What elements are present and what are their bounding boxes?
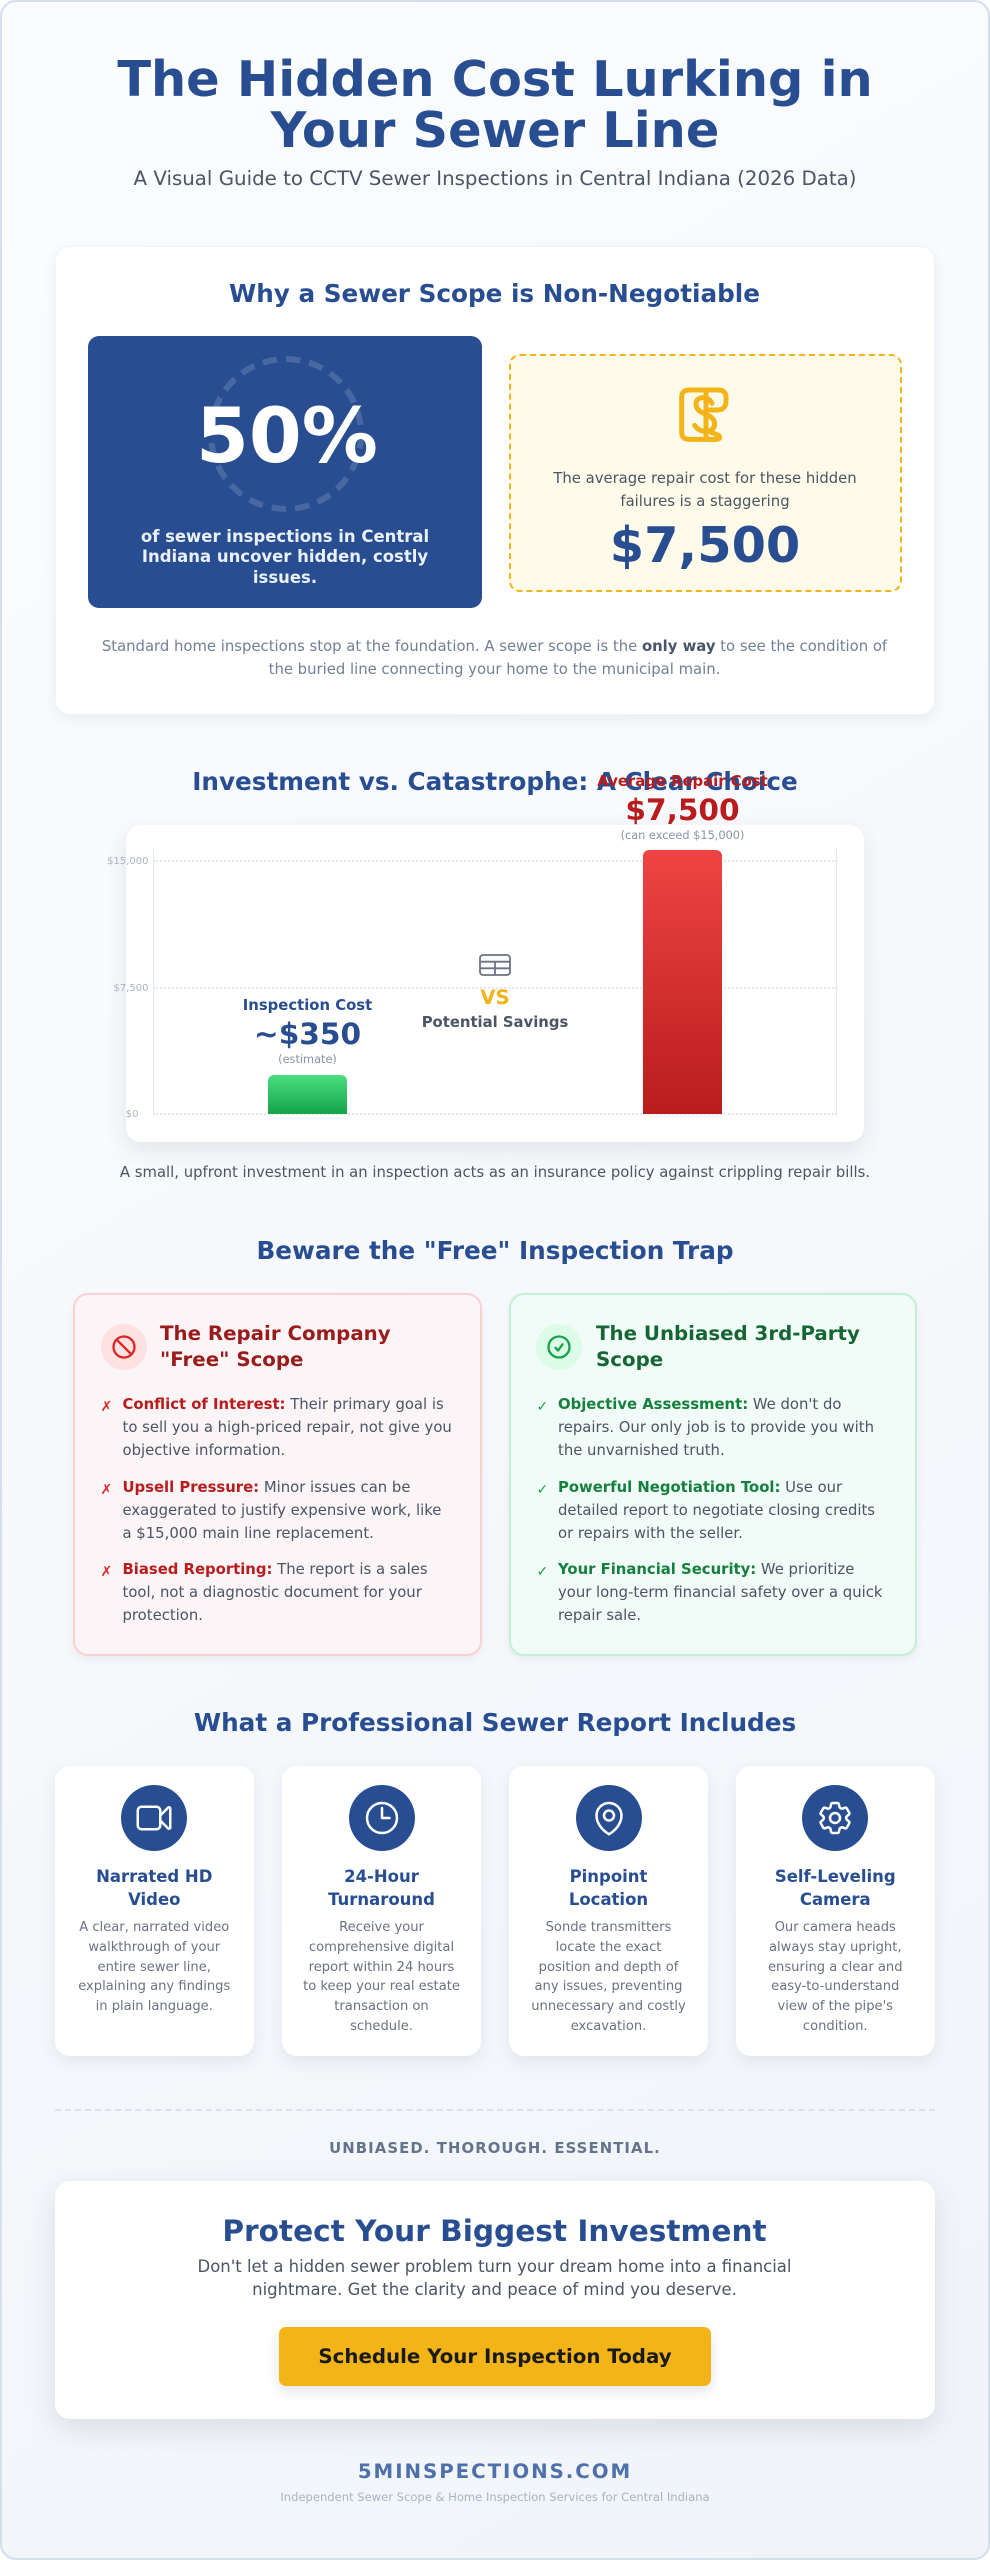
description: Sonde transmitters [546, 1920, 671, 1935]
value: inspection cost: ~$350 [254, 1017, 361, 1051]
label: VS: VS [480, 986, 510, 1009]
description: schedule. [350, 2019, 413, 2034]
item: negotiation tool: Powerful Negotiation Tool: Use our [558, 1479, 842, 1496]
icon: map pin [576, 1785, 642, 1851]
heading: unbiased scope: Scope [596, 1348, 663, 1371]
title: Self-Leveling [775, 1867, 896, 1886]
axis label 15000: $15,000 [107, 856, 148, 866]
item: biased reporting [122, 1561, 428, 1624]
panel: cost bar chart [126, 824, 864, 1142]
note: estimate: (estimate) [278, 1052, 337, 1066]
title [569, 1867, 648, 1909]
heading: unbiased scope [596, 1322, 860, 1371]
heading: repair company scope [160, 1322, 391, 1371]
marker 1: ✓ [536, 1399, 548, 1415]
axis label 0: $0 [126, 1108, 138, 1120]
title: Turnaround [328, 1890, 435, 1909]
item: conflict of interest: to sell you a high-priced repair, not give you [122, 1419, 452, 1436]
panel: why a sewer scope [54, 246, 934, 715]
description: explaining any findings [78, 1979, 230, 1994]
icon: video camera [121, 1785, 187, 1851]
callout text: The average repair cost for these hidden [553, 470, 857, 487]
title: Pinpoint [570, 1867, 647, 1886]
title: Narrated HD [96, 1867, 212, 1886]
heading: investment vs catastrophe: Investment vs. Catastrophe: A Clear Choice [192, 767, 798, 796]
item: biased reporting: Biased Reporting: The report is a sales [122, 1561, 428, 1578]
icon: clock [348, 1785, 414, 1851]
cta text: nightmare. Get the clarity and peace of mind you deserve. [252, 2280, 737, 2298]
description: entire sewer line, [98, 1960, 211, 1975]
subtitle: A Visual Guide to CCTV Sewer Inspections in Central Indiana (2026 Data) [134, 167, 856, 190]
item: negotiation tool: or repairs with the seller. [558, 1525, 743, 1542]
item: objective assessment: the unvarnished truth. [558, 1442, 725, 1459]
title: Location [569, 1890, 648, 1909]
description: always stay upright, [769, 1940, 902, 1955]
stat caption: Indiana uncover hidden, costly [142, 547, 428, 566]
label: potential savings: Potential Savings [422, 1014, 568, 1031]
cta text: Don't let a hidden sewer problem turn your dream home into a financial [198, 2256, 791, 2276]
chart caption: A small, upfront investment in an inspection acts as an insurance policy against crippling repair bills. [120, 1164, 870, 1180]
marker 3: ✗ [100, 1564, 112, 1580]
marker 2: ✗ [100, 1482, 112, 1498]
description [768, 1920, 903, 2034]
stat caption [141, 526, 429, 587]
stat caption: issues. [253, 568, 317, 587]
title: 24-Hour [344, 1867, 419, 1886]
cta button [279, 2327, 711, 2386]
item: conflict of interest: objective information. [122, 1442, 285, 1459]
axis label 7500: $7,500 [114, 982, 148, 994]
item: financial security: Your Financial Security: We prioritize [558, 1561, 854, 1578]
cta button: Schedule Your Inspection Today [318, 2345, 672, 2368]
heading: repair company scope: The Repair Company [160, 1322, 391, 1345]
marker 3: ✓ [536, 1564, 548, 1580]
callout: average repair cost [508, 354, 902, 592]
item: objective assessment: repairs. Our only job is to provide you with [558, 1419, 874, 1436]
heading: repair company scope: "Free" Scope [160, 1348, 303, 1371]
heading: report includes: What a Professional Sewer Report Includes [194, 1708, 796, 1737]
footer brand: 5MINSPECTIONS.COM [358, 2460, 632, 2483]
heading: why a sewer scope: Why a Sewer Scope is Non-Negotiable [229, 279, 760, 308]
item: financial security: repair sale. [558, 1607, 641, 1624]
item: upsell pressure: a $15,000 main line replacement. [122, 1525, 374, 1542]
note: can exceed: (can exceed $15,000) [621, 828, 744, 842]
item: objective assessment: Objective Assessment: We don't do [558, 1396, 841, 1413]
description: transaction on [334, 1999, 429, 2014]
title [117, 50, 873, 159]
icon: prohibited [101, 1324, 147, 1370]
item: negotiation tool [558, 1479, 875, 1542]
panel: repair company scope [73, 1293, 482, 1656]
value: repair cost: $7,500 [625, 793, 740, 827]
title: Video [128, 1890, 180, 1909]
title [96, 1867, 212, 1909]
icon: check circle [536, 1324, 582, 1370]
item: biased reporting: protection. [122, 1607, 203, 1624]
heading: free inspection trap: Beware the "Free" Inspection Trap [256, 1236, 734, 1265]
marker 2: ✓ [536, 1482, 548, 1498]
heading: unbiased scope: The Unbiased 3rd-Party [596, 1322, 860, 1345]
tagline: UNBIASED. THOROUGH. ESSENTIAL. [329, 2140, 661, 2157]
card: self-leveling camera [736, 1766, 934, 2056]
title [775, 1867, 896, 1909]
description: any issues, preventing [535, 1979, 682, 1994]
callout text [553, 470, 857, 510]
cta heading: Protect Your Biggest Investment [222, 2214, 767, 2248]
panel: call to action [54, 2181, 934, 2419]
explanatory paragraph: Standard home inspections stop at the foundation. A sewer scope is the only way to see the condition of [102, 638, 887, 655]
item: financial security: your long-term financial safety over a quick [558, 1584, 882, 1601]
icon: dollar document [679, 388, 728, 442]
description: comprehensive digital [309, 1940, 454, 1955]
description: in plain language. [96, 1999, 213, 2014]
callout text: failures is a staggering [620, 493, 790, 510]
stat number: 50% [196, 391, 378, 480]
description: Our camera heads [775, 1920, 896, 1935]
description [531, 1920, 686, 2034]
plot frame [153, 849, 837, 1113]
label: average repair cost: Average Repair Cost [597, 773, 768, 790]
bar: repair cost [643, 850, 722, 1114]
description: locate the exact [556, 1940, 661, 1955]
description [78, 1920, 230, 2014]
item: negotiation tool: detailed report to negotiate closing credits [558, 1502, 875, 1519]
description: view of the pipe's [778, 1999, 893, 2014]
icon: savings table [479, 954, 511, 976]
card: pinpoint location [509, 1766, 708, 2056]
description: unnecessary and costly [531, 1999, 686, 2014]
item: conflict of interest [122, 1396, 452, 1459]
item: upsell pressure: exaggerated to justify expensive work, like [122, 1502, 441, 1519]
item: conflict of interest: Conflict of Interest: Their primary goal is [122, 1396, 444, 1413]
callout number: $7,500 [610, 516, 800, 574]
description: A clear, narrated video [79, 1920, 229, 1935]
item: financial security [558, 1561, 882, 1624]
description: easy-to-understand [771, 1979, 899, 1994]
description: Receive your [339, 1920, 424, 1935]
description: to keep your real estate [303, 1979, 460, 1994]
item: objective assessment [558, 1396, 874, 1459]
marker 1: ✗ [100, 1399, 112, 1415]
stat panel: 50 percent [88, 336, 482, 608]
explanatory paragraph: the buried line connecting your home to the municipal main. [269, 661, 720, 678]
footer note: Independent Sewer Scope & Home Inspection Services for Central Indiana [280, 2490, 710, 2504]
panel: unbiased third party scope [508, 1293, 917, 1656]
item: biased reporting: tool, not a diagnostic document for your [122, 1584, 422, 1601]
stat caption: of sewer inspections in Central [141, 526, 429, 546]
title: The Hidden Cost Lurking in [117, 50, 873, 108]
description: position and depth of [539, 1960, 678, 1975]
description: excavation. [571, 2019, 646, 2034]
description: ensuring a clear and [768, 1960, 903, 1975]
card: narrated video [54, 1766, 254, 2056]
description: condition. [803, 2019, 868, 2034]
title: Camera [800, 1890, 871, 1909]
description [303, 1920, 460, 2034]
dashed ring [208, 356, 364, 512]
label: inspection cost: Inspection Cost [243, 997, 372, 1014]
card: turnaround [282, 1766, 481, 2056]
title [328, 1867, 435, 1909]
description: walkthrough of your [88, 1940, 220, 1955]
bar: inspection cost [268, 1074, 347, 1114]
icon: gear [802, 1785, 868, 1851]
explanatory paragraph [102, 638, 888, 678]
title: Your Sewer Line [271, 101, 719, 159]
item: upsell pressure: Upsell Pressure: Minor issues can be [122, 1479, 410, 1496]
description: report within 24 hours [309, 1960, 454, 1975]
cta text [198, 2256, 791, 2298]
item: upsell pressure [122, 1479, 441, 1542]
